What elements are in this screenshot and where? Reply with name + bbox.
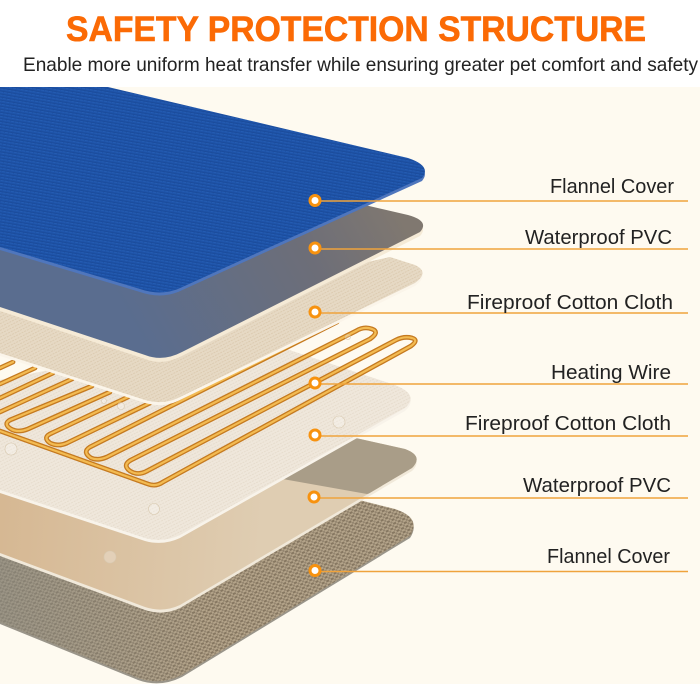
heating wire — [0, 322, 415, 485]
layer: upper fireproof cotton cloth — [0, 257, 422, 405]
callout: fireproof cotton cloth lower: Fireproof Cotton Cloth — [465, 413, 671, 435]
layer: lower fireproof cotton cloth — [0, 332, 411, 543]
title: SAFETY PROTECTION STRUCTURE — [66, 10, 646, 49]
callout: heating wire: Heating Wire — [551, 362, 671, 384]
callout: flannel cover lower: Flannel Cover — [547, 546, 670, 568]
callout: waterproof PVC — [310, 227, 688, 253]
callout: fireproof cotton cloth: Fireproof Cotton Cloth — [467, 292, 673, 314]
water droplets — [5, 334, 350, 563]
layer: top flannel cover — [0, 87, 425, 296]
subtitle: Enable more uniform heat transfer while ensuring greater pet comfort and safety — [23, 54, 698, 76]
callout: flannel cover: Flannel Cover — [550, 176, 674, 198]
callout: flannel cover lower — [310, 546, 688, 576]
callout: fireproof cotton cloth lower — [310, 413, 688, 440]
callout: waterproof PVC: Waterproof PVC — [525, 227, 672, 249]
callout: waterproof PVC lower — [309, 475, 688, 502]
callout: waterproof PVC lower: Waterproof PVC — [523, 475, 671, 497]
layer: bottom flannel cover — [0, 485, 414, 683]
callout: heating wire — [310, 362, 688, 388]
layer: upper waterproof PVC — [0, 190, 423, 362]
callout: fireproof cotton cloth — [310, 292, 688, 317]
layer: lower waterproof PVC — [0, 430, 430, 613]
callout: flannel cover — [310, 176, 688, 206]
